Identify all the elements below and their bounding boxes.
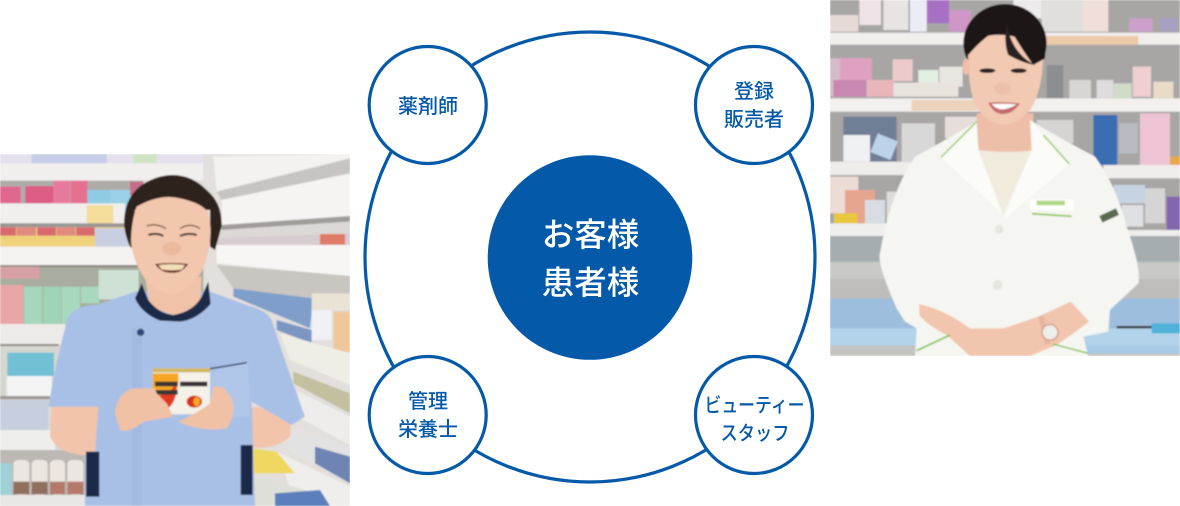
watch	[1038, 315, 1050, 345]
neck and collar	[145, 277, 202, 317]
hands	[115, 388, 173, 431]
centre circle: customers and patients: 患者様	[542, 265, 639, 301]
left shelves	[0, 154, 203, 164]
inner top	[978, 150, 1032, 213]
node: pharmacist	[369, 46, 486, 164]
lapels	[941, 122, 1002, 213]
node: beauty staff	[696, 356, 812, 474]
counter	[830, 298, 1180, 329]
hair back	[962, 3, 1048, 60]
shelf products	[830, 15, 858, 32]
node: registered dietitian	[369, 356, 486, 474]
medicine box	[153, 368, 210, 414]
diagram: team ring around customers	[365, 32, 815, 482]
right shelves	[202, 266, 208, 292]
centre circle: customers and patients: お客様	[542, 217, 639, 253]
centre circle: customers and patients	[488, 155, 692, 360]
photo: female pharmacist in white coat in front of drug shelves	[830, 0, 1180, 356]
node: registered seller: 販売者	[724, 108, 784, 131]
node: registered dietitian: 栄養士	[398, 418, 458, 441]
name badge	[1030, 199, 1073, 210]
lower wall	[830, 236, 1180, 262]
neck	[977, 113, 1033, 157]
node: registered seller: 登録	[734, 80, 774, 103]
person: arms behind sleeves	[50, 406, 99, 456]
head	[124, 175, 222, 250]
node: pharmacist: 薬剤師	[398, 95, 458, 118]
node: registered seller	[696, 46, 812, 164]
node: beauty staff: ビューティー	[704, 394, 804, 417]
face	[968, 35, 1043, 125]
uniform	[48, 292, 305, 506]
photo: male staff in blue uniform holding a medicine box	[0, 154, 350, 506]
node: registered dietitian: 管理	[408, 390, 448, 413]
forearms and hands	[919, 302, 1089, 356]
coat	[880, 120, 1139, 356]
outer ring	[365, 32, 815, 482]
node: beauty staff: スタッフ	[720, 422, 790, 445]
